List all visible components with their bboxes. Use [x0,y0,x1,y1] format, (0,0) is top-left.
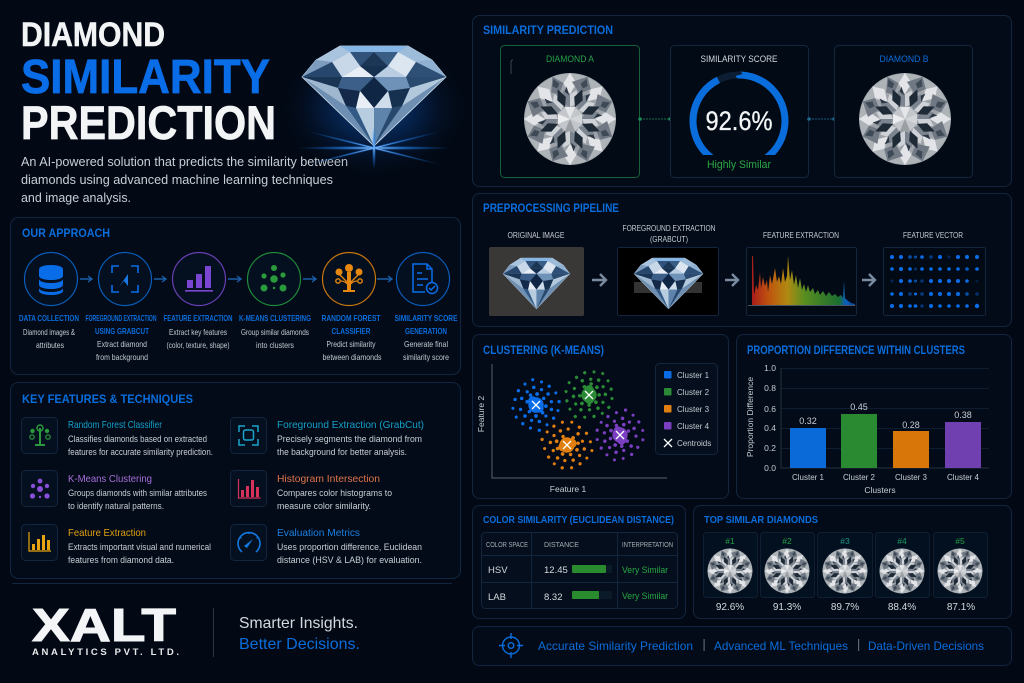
step: data collection: DATA COLLECTION [19,314,79,323]
feature: evaluation metrics [230,524,422,565]
benefit text [538,639,984,653]
arrow [592,274,606,286]
rank 5: 87.1% [947,602,975,613]
scatter plot: Feature 1 [550,484,586,494]
feature: k-means clustering: K-Means Clustering [68,473,152,485]
feature: feature extraction [22,524,211,565]
legend: Cluster 3 [677,405,710,414]
feature: evaluation metrics: Uses proportion difference, Euclidean [277,542,422,552]
benefit text: Data-Driven Decisions [868,639,984,653]
step: feature extraction [164,252,233,350]
intro text [21,154,348,205]
feature: foreground extraction: Precisely segments the diamond from [277,434,422,444]
banner: key benefits [472,626,1012,666]
step: feature extraction histogram [746,230,856,316]
table: HSV [488,565,508,576]
intro text: diamonds using advanced machine learning techniques [21,172,333,187]
step: original image [489,230,584,316]
feature: foreground extraction: the background for better analysis. [277,447,407,457]
bar chart: Proportion Difference [745,377,755,457]
panel: preprocessing pipeline [472,194,1012,326]
bar chart: 1.0 [764,363,776,373]
title line: Prediction: PREDICTION [21,96,276,149]
step: foreground extraction: FOREGROUND EXTRACTION [86,314,157,323]
bar chart: 0.4 [764,423,776,433]
feature: histogram intersection [230,470,392,511]
icon: target [499,633,523,658]
panel: proportion difference bar chart [736,334,1012,498]
panel: top similar diamonds [694,506,1012,618]
arrow [377,276,392,282]
rank 5: #5 [955,536,965,546]
bar chart: Clusters [864,485,896,495]
bar chart: Cluster 3 [895,473,928,482]
bar chart: 0.32 [799,416,817,426]
intro text: and image analysis. [21,190,131,205]
card: similarity score gauge [670,46,808,178]
feature: random forest classifier: Classifies diamonds based on extracted [68,434,207,444]
step: random forest classifier: Predict similarity [326,340,376,349]
step: data collection: Diamond images & [23,328,75,337]
benefit text: Accurate Similarity Prediction [538,639,693,653]
feature: evaluation metrics: distance (HSV & LAB) for evaluation. [277,555,422,565]
heading: our approach: OUR APPROACH [22,226,110,240]
step: k-means clustering: Group similar diamonds [241,328,309,337]
feature: random forest classifier: features for accurate similarity prediction. [68,447,213,457]
bar chart: 0.38 [954,410,972,420]
card: diamond A: DIAMOND A [546,54,595,65]
step: foreground extraction: FOREGROUND EXTRACTION [622,223,716,233]
heading: COLOR SIMILARITY (EUCLIDEAN DISTANCE) [483,514,674,526]
rank 4: #4 [897,536,907,546]
rank 3: #3 [840,536,850,546]
arrow [725,274,738,286]
step: feature vector dots [884,230,986,316]
arrow [154,276,166,282]
step: feature extraction: (color, texture, shape) [166,341,230,350]
step: foreground extraction: USING GRABCUT [95,327,149,336]
step: data collection: attributes [36,341,64,350]
feature: foreground extraction [230,418,424,457]
arrow [862,274,875,286]
table: DISTANCE [544,542,579,549]
rank 1: 92.6% [716,602,744,613]
rank 2: #2 [782,536,792,546]
arrow [303,276,316,282]
heading: key features: KEY FEATURES & TECHNIQUES [22,392,193,406]
step: feature vector dots: FEATURE VECTOR [903,230,963,240]
table: Very Similar [622,591,668,602]
legend: Centroids [677,439,711,448]
feature: feature extraction: Extracts important visual and numerical [68,542,211,552]
feature: histogram intersection: Histogram Intersection [277,473,380,485]
table: Very Similar [622,565,668,576]
step: feature extraction: FEATURE EXTRACTION [164,314,233,323]
table: INTERPRETATION [622,542,673,549]
divider above footer [12,583,452,584]
step: foreground extraction: Extract diamond [97,340,147,349]
step: similarity score generation [394,252,458,362]
step: random forest classifier: between diamonds [322,353,382,362]
step: original image: ORIGINAL IMAGE [508,230,565,240]
step: similarity score generation: SIMILARITY SCORE [394,314,458,323]
panel: color similarity table [472,506,686,618]
legend: Cluster 2 [677,388,710,397]
card: similarity score gauge: SIMILARITY SCORE [700,54,778,65]
card: similarity score gauge: Highly Similar [707,159,771,171]
feature: evaluation metrics: Evaluation Metrics [277,527,360,539]
step: foreground extraction [86,252,157,362]
card: diamond B [834,46,972,178]
heading: PREPROCESSING PIPELINE [483,201,619,215]
rank 4 [876,532,930,613]
panel: clustering k-means [472,334,728,498]
step: feature extraction histogram: FEATURE EXTRACTION [763,230,839,240]
arrow [228,276,241,282]
card: diamond A [500,46,640,178]
company logo and tagline [32,599,360,658]
table: LAB [488,592,506,603]
rank 2: 91.3% [773,602,801,613]
step: k-means clustering: K-MEANS CLUSTERING [239,314,311,323]
feature: feature extraction: Feature Extraction [68,527,146,539]
panel: our approach [10,218,460,374]
feature: histogram intersection: Compares color histograms to [277,488,392,498]
scatter plot: Feature 2 [476,396,486,432]
title line: Diamond: DIAMOND [21,16,165,54]
feature: k-means clustering: Groups diamonds with similar attributes [68,488,207,498]
legend [656,364,718,454]
scatter plot [476,359,667,494]
panel: similarity prediction [472,16,1012,186]
step: similarity score generation: similarity score [403,353,449,362]
bar chart: 0.45 [850,402,868,412]
feature: random forest classifier: Random Forest Classifier [68,419,162,431]
bar chart: Cluster 1 [792,473,825,482]
bar chart: 0.8 [764,383,776,393]
feature: k-means clustering [22,470,207,511]
step: data collection [19,252,79,350]
bar chart: 0.2 [764,443,776,453]
card: similarity score gauge: 92.6% [706,106,772,136]
heading: PROPORTION DIFFERENCE WITHIN CLUSTERS [747,343,965,357]
step: random forest classifier: CLASSIFIER [332,327,371,336]
step: similarity score generation: GENERATION [405,327,447,336]
bar chart: 0.0 [764,463,776,473]
step: random forest classifier [322,252,382,362]
rank 4: 88.4% [888,602,916,613]
feature: k-means clustering: to identify natural patterns. [68,501,164,511]
legend: Cluster 1 [677,371,710,380]
step: random forest classifier: RANDOM FOREST [322,314,380,323]
title line: Similarity: SIMILARITY [21,51,270,104]
step: foreground extraction: (GRABCUT) [650,234,688,244]
heading: TOP SIMILAR DIAMONDS [704,514,818,526]
company logo and tagline: Better Decisions. [239,636,360,653]
table: 8.32 [544,592,562,603]
panel: key features and techniques [10,382,460,578]
heading: SIMILARITY PREDICTION [483,23,613,37]
rank 3: 89.7% [831,602,859,613]
rank 1: #1 [725,536,735,546]
tagline: Smarter Insights. [239,615,358,632]
arrow [80,276,92,282]
bar chart: Cluster 4 [947,473,980,482]
bar chart: Cluster 2 [843,473,876,482]
heading: CLUSTERING (K-MEANS) [483,343,604,357]
connector A [638,117,672,121]
legend: Cluster 4 [677,422,710,431]
step: foreground extraction: from background [96,353,148,362]
feature: feature extraction: features from diamond data. [68,555,174,565]
feature: foreground extraction: Foreground Extraction (GrabCut) [277,419,424,431]
connector B [807,117,836,121]
step: k-means clustering: into clusters [256,341,294,350]
table: 12.45 [544,565,568,576]
card: diamond B: DIAMOND B [880,54,928,65]
bar chart: 0.6 [764,404,776,414]
hero diamond illustration with glow [279,38,469,178]
benefit text: Advanced ML Techniques [714,639,848,653]
table: COLOR SPACE [486,542,528,549]
feature: histogram intersection: measure color similarity. [277,501,371,511]
step: k-means clustering [239,252,311,350]
rank 5 [934,532,988,613]
intro text: An AI-powered solution that predicts the similarity between [21,154,348,169]
table [482,532,678,608]
feature: random forest classifier [22,418,213,457]
logo subtitle: ANALYTICS PVT. LTD. [32,647,179,658]
hero: title and intro [21,16,348,205]
logo wordmark: XALT [32,599,176,651]
rank 3 [818,532,872,613]
bar chart: 0.28 [902,420,920,430]
step: foreground extraction [618,223,718,316]
rank 1 [704,532,758,613]
bar chart [745,363,989,495]
step: similarity score generation: Generate final [404,340,448,349]
step: feature extraction: Extract key features [169,328,227,337]
rank 2 [760,532,814,613]
